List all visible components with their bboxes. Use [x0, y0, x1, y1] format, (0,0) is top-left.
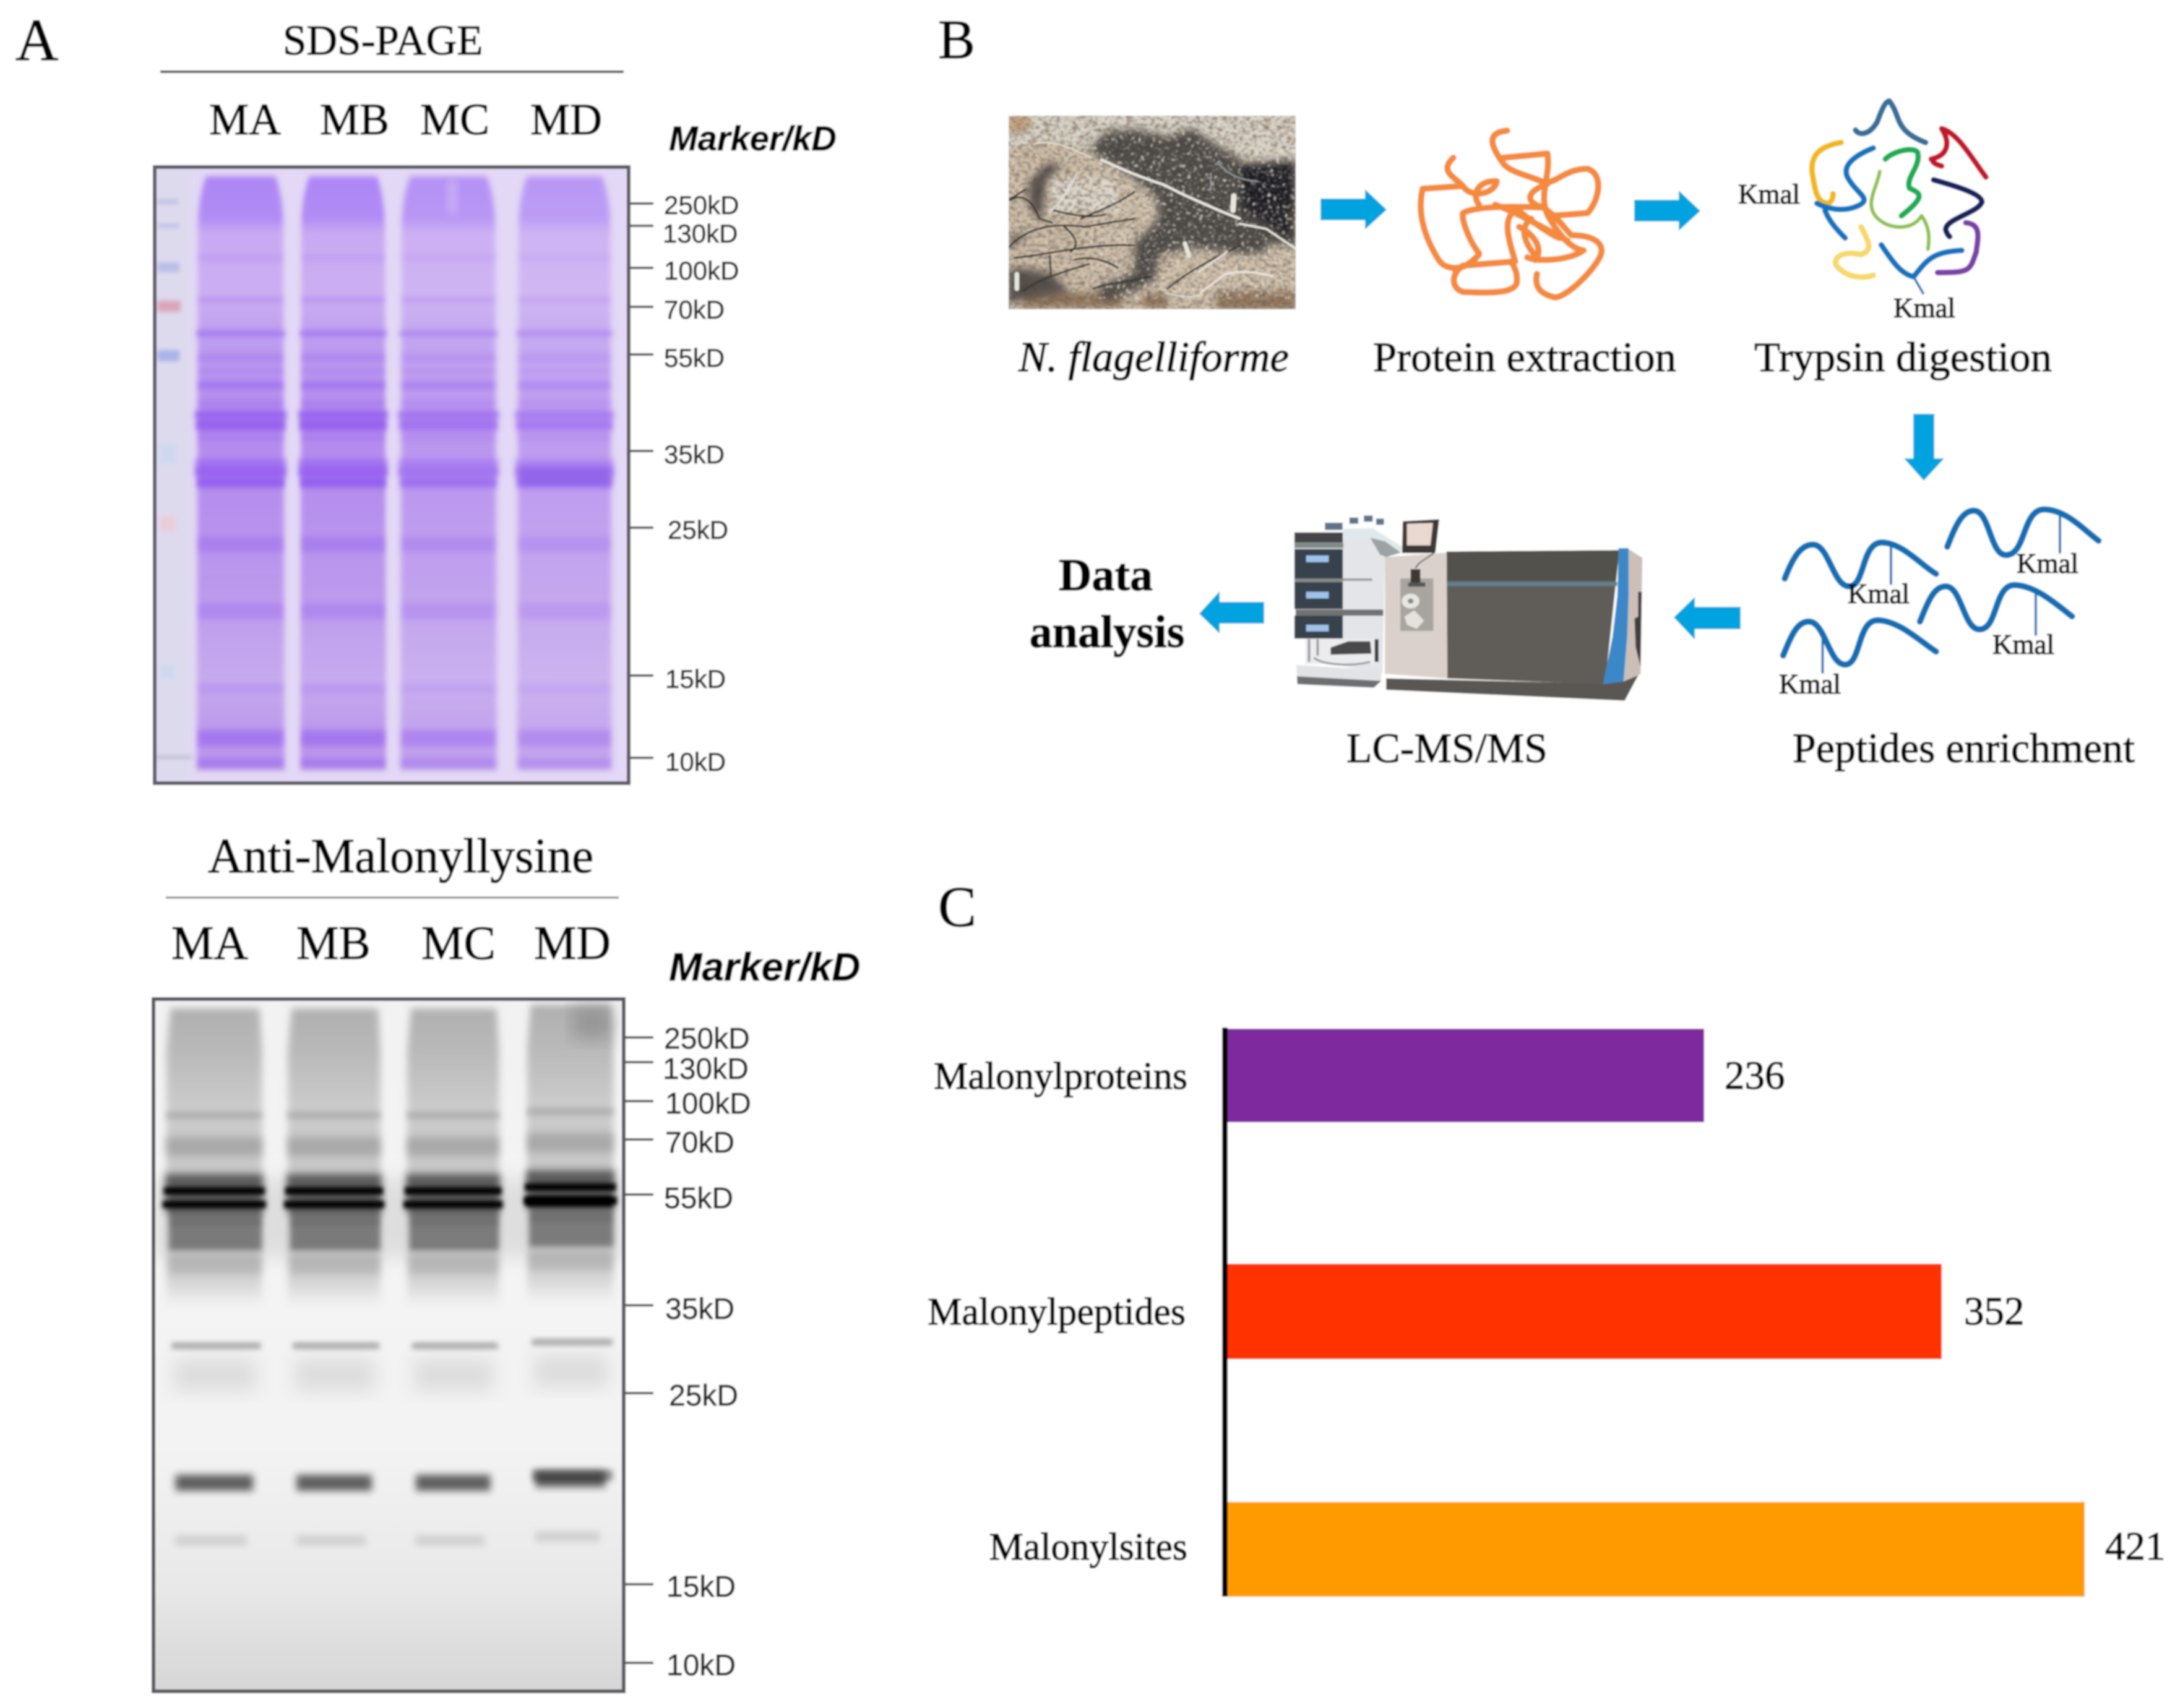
caption: N. flagelliforme: N. flagelliforme: [1018, 333, 1289, 380]
bar: Malonylproteins: Malonylproteins: [934, 1055, 1187, 1097]
marker ladder: [155, 200, 192, 758]
lane MC: [398, 176, 499, 770]
heading: Anti-Malonyllysine: Anti-Malonyllysine: [208, 830, 593, 883]
lane labels: SDS-PAGE: MB: [320, 95, 389, 144]
tick marks and size labels: SDS-PAGE: 55kD: [664, 343, 725, 372]
lane MA: [163, 1008, 266, 1545]
tick marks and size labels: Anti-Malonyllysine: 55kD: [664, 1182, 733, 1215]
tick marks and size labels: SDS-PAGE: 70kD: [664, 295, 725, 324]
lane MA: [194, 176, 287, 770]
tick marks and size labels: SDS-PAGE: 250kD: [664, 191, 739, 220]
bar: Malonylsites: 421: [2105, 1524, 2166, 1569]
axis line: [1222, 1028, 1228, 1597]
tick marks and size labels: Anti-Malonyllysine: 25kD: [669, 1380, 738, 1412]
icon: enriched peptides: [1779, 509, 2098, 700]
icon: enriched peptides: Kmal: [1848, 578, 1910, 609]
icon: LC-MS/MS instrument: [1294, 515, 1642, 701]
tick marks and size labels: SDS-PAGE: 130kD: [663, 219, 738, 248]
bar chart: [928, 1028, 2166, 1597]
tick marks and size labels: SDS-PAGE: [631, 191, 739, 776]
arrow: LC-MS to data analysis: [1199, 591, 1264, 633]
bar: Malonylpeptides: [928, 1264, 2025, 1359]
bar: Malonylsites: Malonylsites: [989, 1526, 1187, 1568]
lane labels: SDS-PAGE: MA: [209, 95, 281, 144]
marker heading: Anti-Malonyllysine: Marker/kD: [669, 945, 860, 989]
tick marks and size labels: Anti-Malonyllysine: 250kD: [664, 1023, 750, 1055]
lane labels: SDS-PAGE: [209, 95, 602, 144]
tick marks and size labels: SDS-PAGE: 25kD: [668, 515, 728, 544]
tick marks and size labels: Anti-Malonyllysine: 10kD: [666, 1649, 736, 1682]
icon: enriched peptides: Kmal: [2017, 548, 2078, 579]
icon: enriched peptides: Kmal: [1992, 629, 2054, 660]
lane MD: [523, 1005, 617, 1542]
heading: SDS-PAGE: SDS-PAGE: [283, 17, 483, 64]
arrow: protein to trypsin: [1634, 191, 1700, 231]
tick marks and size labels: Anti-Malonyllysine: 15kD: [666, 1571, 736, 1603]
text: Data analysis: [1030, 550, 1184, 658]
caption: Peptides enrichment: Peptides enrichment: [1793, 724, 2135, 771]
lane labels: SDS-PAGE: MC: [420, 95, 489, 144]
bar: Malonylsites: [989, 1502, 2166, 1597]
tick marks and size labels: Anti-Malonyllysine: 100kD: [665, 1088, 751, 1120]
arrow: peptides to LC-MS: [1674, 597, 1741, 640]
arrow: down to peptides: [1904, 414, 1944, 481]
lane MC: [403, 1008, 502, 1545]
text: Data analysis: Data: [1059, 550, 1153, 601]
tick marks and size labels: SDS-PAGE: 100kD: [664, 256, 739, 285]
bar: Malonylproteins: 236: [1725, 1054, 1785, 1098]
western blot: [153, 999, 625, 1691]
tick marks and size labels: Anti-Malonyllysine: 70kD: [665, 1127, 734, 1159]
bar: Malonylpeptides: Malonylpeptides: [928, 1291, 1186, 1333]
tick marks and size labels: Anti-Malonyllysine: 130kD: [663, 1053, 749, 1086]
panel C label: C: [938, 875, 976, 939]
arrow: photo to protein: [1320, 189, 1387, 230]
marker heading: SDS-PAGE: Marker/kD: [669, 119, 837, 158]
icon: digested peptide fragments: Kmal: [1893, 293, 1955, 324]
lane MD: [515, 176, 614, 770]
icon: digested peptide fragments: Kmal: [1738, 179, 1800, 210]
lane labels: Anti-Malonyllysine: [171, 916, 611, 969]
lane MB: [284, 1008, 384, 1545]
caption: Protein extraction: Protein extraction: [1373, 333, 1676, 380]
lane labels: Anti-Malonyllysine: MC: [421, 916, 496, 969]
bar: Malonylproteins: [934, 1029, 1785, 1122]
tick marks and size labels: SDS-PAGE: 35kD: [664, 440, 725, 469]
gel: SDS-PAGE: [155, 167, 629, 783]
panel A label: A: [15, 7, 58, 73]
lane MB: [298, 176, 388, 770]
tick marks and size labels: Anti-Malonyllysine: 35kD: [665, 1293, 734, 1326]
dark filament masses: [1009, 129, 1296, 304]
lane labels: Anti-Malonyllysine: MA: [171, 916, 248, 969]
lane labels: Anti-Malonyllysine: MB: [296, 916, 371, 969]
caption: LC-MS/MS: LC-MS/MS: [1346, 724, 1548, 771]
tick marks and size labels: SDS-PAGE: 15kD: [665, 664, 726, 693]
caption: Trypsin digestion: Trypsin digestion: [1754, 333, 2052, 380]
text: Data analysis: analysis: [1030, 607, 1184, 658]
icon: digested peptide fragments: [1738, 101, 1986, 324]
lane labels: SDS-PAGE: MD: [530, 95, 602, 144]
icon: enriched peptides: Kmal: [1779, 669, 1841, 700]
tick marks and size labels: Anti-Malonyllysine: [625, 1023, 751, 1682]
lane labels: Anti-Malonyllysine: MD: [534, 916, 611, 969]
photo: N. flagelliforme: [1009, 116, 1296, 309]
icon: tangled protein: [1421, 131, 1601, 298]
tick marks and size labels: SDS-PAGE: 10kD: [665, 747, 726, 776]
bar: Malonylpeptides: 352: [1964, 1289, 2025, 1334]
panel B label: B: [938, 9, 975, 71]
